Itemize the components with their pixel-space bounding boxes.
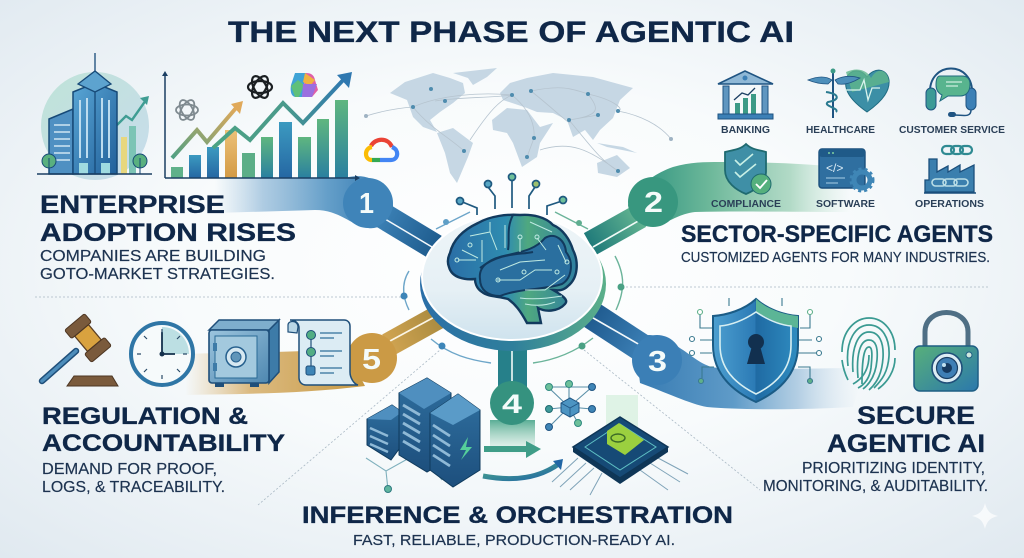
heading: regulation and accountability: DEMAND FOR PROOF, xyxy=(42,461,217,478)
industry labels: HEALTHCARE xyxy=(806,125,875,136)
icon: circuit brain xyxy=(448,174,577,323)
icon: compliance shield xyxy=(725,144,771,194)
heading: enterprise adoption xyxy=(40,191,296,283)
icon: software window and gear: </> xyxy=(826,161,843,175)
heading: inference and orchestration: INFERENCE & ORCHESTRATION xyxy=(302,502,733,529)
icon: copilot logo xyxy=(291,73,318,97)
ribbon 4: 4 xyxy=(502,389,522,419)
heading: secure agentic ai: SECURE xyxy=(857,402,975,430)
heading: regulation and accountability: REGULATION & xyxy=(42,403,248,430)
industry labels xyxy=(711,125,1005,210)
icon: server racks xyxy=(366,378,480,492)
hub orbit arcs xyxy=(400,212,624,363)
icon: fingerprint xyxy=(842,318,895,390)
heading: sector-specific agents xyxy=(681,221,993,266)
map nodes xyxy=(364,87,673,173)
shield circuit lines xyxy=(690,298,822,384)
central hub xyxy=(400,212,624,363)
title: THE NEXT PHASE OF AGENTIC AI xyxy=(228,16,794,49)
icon: office buildings xyxy=(37,53,152,180)
icon: safe xyxy=(209,320,279,387)
icon: padlock with lens xyxy=(914,312,978,391)
heading: regulation and accountability: ACCOUNTABILITY xyxy=(42,430,285,457)
heading: inference and orchestration: FAST, RELIABLE, PRODUCTION-READY AI. xyxy=(353,532,675,549)
heading: enterprise adoption: ENTERPRISE xyxy=(40,191,225,219)
ribbon 4 xyxy=(490,335,535,456)
icon: customer service headset xyxy=(926,68,976,117)
dotted dividers xyxy=(35,287,990,505)
icon: openai logo grey xyxy=(176,98,198,122)
icon: security shield xyxy=(690,298,822,402)
ribbon 5: 5 xyxy=(362,344,381,376)
ribbon 2 xyxy=(590,162,850,247)
heading: enterprise adoption: ADOPTION RISES xyxy=(40,219,296,247)
icon: bank xyxy=(718,71,773,119)
ribbon 1 xyxy=(215,176,435,247)
heading: enterprise adoption: COMPANIES ARE BUILDING xyxy=(40,248,266,265)
icon: software window and gear xyxy=(819,149,873,191)
icon: openai logo black xyxy=(248,74,272,100)
industry labels: SOFTWARE xyxy=(816,199,875,210)
bar chart xyxy=(162,71,360,181)
icon: healthcare xyxy=(808,68,889,118)
arrows: data flow xyxy=(483,441,563,479)
ribbon 1: 1 xyxy=(359,188,374,220)
icon: audit log scroll xyxy=(288,320,358,385)
world map xyxy=(390,68,637,183)
heading: sector-specific agents: CUSTOMIZED AGENTS FOR MANY INDUSTRIES. xyxy=(681,250,990,266)
ribbon 2: 2 xyxy=(644,187,663,219)
heading: sector-specific agents: SECTOR-SPECIFIC AGENTS xyxy=(681,221,993,248)
icon: ai chip xyxy=(552,395,688,495)
industry labels: BANKING xyxy=(721,125,770,136)
heading: regulation and accountability: LOGS, & TRACEABILITY. xyxy=(42,479,225,496)
icon: node network xyxy=(546,380,596,430)
ribbon 5 xyxy=(185,314,442,395)
brain top connectors xyxy=(456,174,566,215)
industry labels: OPERATIONS xyxy=(915,199,984,210)
heading: enterprise adoption: GOTO-MARKET STRATEGIES. xyxy=(40,266,275,283)
ribbon 3 xyxy=(588,314,865,409)
brain circuit traces xyxy=(455,222,569,305)
industry labels: COMPLIANCE xyxy=(711,199,781,210)
icon: gavel xyxy=(42,314,118,386)
industry labels: CUSTOMER SERVICE xyxy=(899,125,1005,136)
map network lines xyxy=(366,88,671,171)
icon: google cloud logo xyxy=(366,140,397,160)
heading: inference and orchestration xyxy=(302,502,733,549)
heading: secure agentic ai: PRIORITIZING IDENTITY, xyxy=(802,460,985,477)
heading: secure agentic ai: MONITORING, & AUDITABILITY. xyxy=(763,478,988,495)
icon: operations factory xyxy=(924,146,976,193)
ribbon 3: 3 xyxy=(648,346,667,378)
heading: secure agentic ai: AGENTIC AI xyxy=(827,430,985,458)
icon: clock xyxy=(131,323,193,385)
heading: secure agentic ai xyxy=(763,402,988,495)
icon: sparkle watermark xyxy=(972,503,998,529)
heading: regulation and accountability xyxy=(42,403,285,496)
